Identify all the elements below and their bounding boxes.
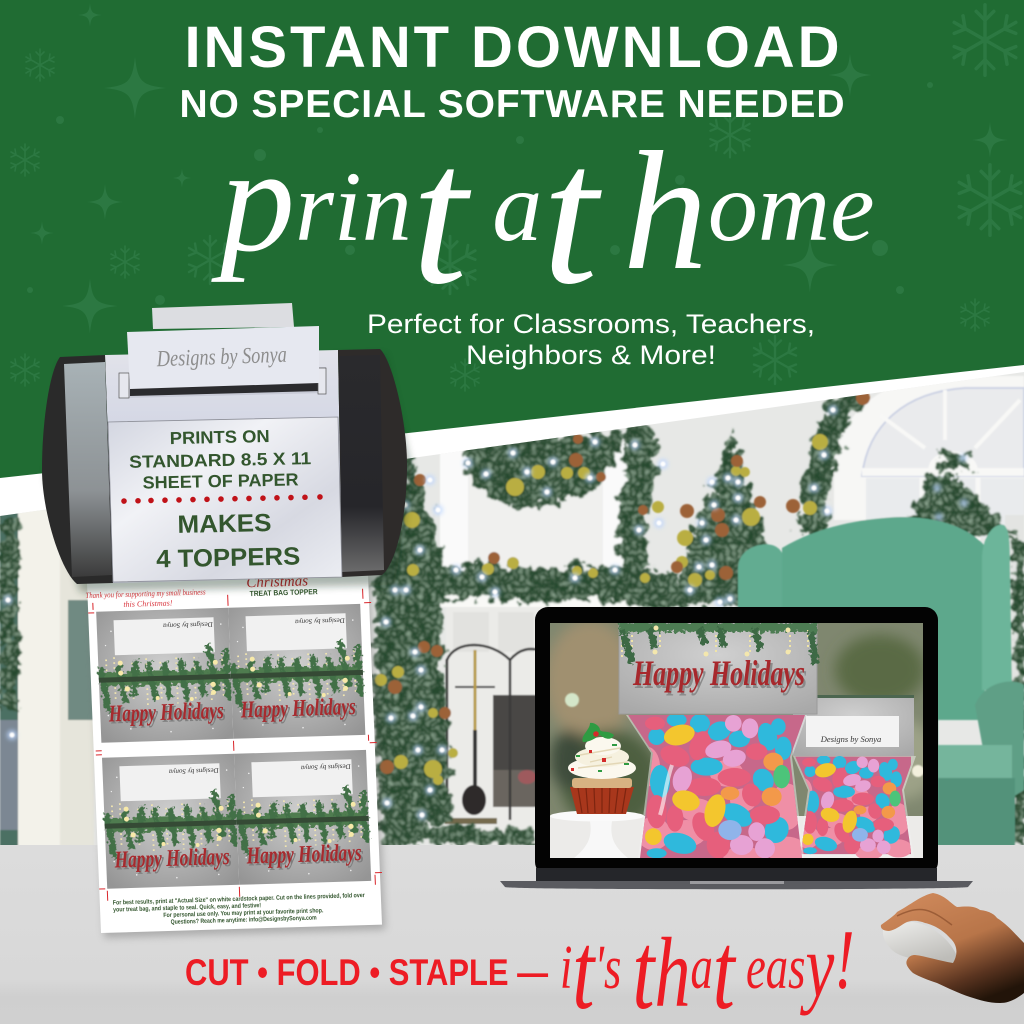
bottom slogan: a: [690, 933, 713, 1002]
small topper: [793, 695, 914, 756]
bottom slogan: !: [834, 913, 855, 1008]
front panel: [108, 417, 342, 582]
white mantel and fireplace: [440, 593, 650, 845]
bottom slogan: 's: [594, 933, 632, 1002]
printer label text: [120, 425, 324, 574]
script heading: print at home: h: [623, 117, 708, 305]
topper panel 2: Happy Holidays: [240, 694, 356, 724]
laptop screen: [550, 623, 923, 858]
cupcake: [568, 723, 636, 814]
topper panel 4: Designs by Sonya: [300, 762, 352, 772]
sheet instructions: [113, 892, 366, 928]
topper panel 3: [102, 754, 239, 889]
paper emerging from printer: Designs by Sonya: [156, 342, 287, 371]
sheet instructions: your treat bag, and staple to seal. Quick, easy, and festive!: [113, 902, 261, 914]
laptop hinge and base: [500, 868, 973, 889]
large topper: [619, 623, 817, 714]
topper panel 3: Happy Holidays: [113, 844, 230, 874]
printer label text: PRINTS ON: [169, 426, 270, 448]
sheet instructions: For personal use only. You may print at your favorite print shop.: [163, 907, 324, 919]
left grip: [42, 355, 113, 584]
bottom slogan: [185, 910, 855, 1024]
cut marks: [88, 589, 383, 901]
tagline: Neighbors & More!: [466, 340, 716, 370]
topper panel 4: [234, 750, 371, 885]
sheet header text: [85, 573, 319, 610]
foliage: trees, wreath and garlands: [0, 393, 1024, 845]
sheet instructions: Questions? Reach me anytime: info@DesignsbySonya.com: [171, 915, 317, 926]
arched window: [834, 376, 1024, 845]
topper panel 4: Happy Holidays: [245, 840, 362, 870]
sheet header text: Christmas: [246, 573, 309, 591]
hand: [881, 893, 1024, 1003]
topper panel 2: Happy Holidays: [242, 696, 358, 726]
sheet header text: Thank you for supporting my small business: [85, 587, 206, 600]
script heading: print at home: t: [542, 105, 602, 326]
fairy lights: [3, 405, 968, 820]
script heading: print at home: rin: [295, 151, 412, 262]
sheet instructions: For best results, print at "Actual Size" on white cardstock paper. Cut on the lines provided, fold over: [113, 892, 365, 907]
left window and columns: [0, 510, 94, 850]
green header background: [0, 0, 1024, 520]
finger creases: [897, 909, 952, 925]
sheet header text: TREAT BAG TOPPER: [249, 587, 318, 598]
back paper tray: [152, 303, 294, 329]
title: instant download: INSTANT DOWNLOAD: [184, 15, 840, 80]
bottom slogan: eas: [735, 933, 805, 1002]
printer shadow: [46, 355, 412, 592]
small topper: Designs by Sonya: [820, 734, 881, 744]
script heading: print at home: ome: [708, 151, 874, 262]
bottom slogan: CUT • FOLD • STAPLE —: [185, 952, 548, 993]
topper panel 4: Happy Holidays: [247, 842, 364, 872]
script heading: print at home: p: [211, 117, 295, 283]
small treat bag: [791, 695, 916, 860]
tagline: [367, 309, 815, 370]
topper panel 3: Happy Holidays: [115, 846, 232, 875]
printer label text: SHEET OF PAPER: [142, 469, 299, 493]
tagline: Perfect for Classrooms, Teachers,: [367, 309, 815, 339]
room photo background: [0, 370, 1024, 850]
grey floor: [0, 845, 1024, 1024]
table: [550, 816, 923, 858]
decorative snowflakes and sparkles: [11, 3, 1021, 391]
red dotted divider: [121, 494, 323, 504]
topper panel 1: Designs by Sonya: [162, 620, 214, 630]
topper panel 1: [96, 608, 233, 743]
right grip: [338, 349, 407, 577]
script heading: print at home: a: [467, 151, 542, 262]
cake stand: [550, 810, 644, 858]
topper panel 1: Happy Holidays: [110, 700, 226, 729]
large topper: Happy Holidays: [634, 656, 807, 696]
large treat bag: [619, 623, 817, 867]
mouse: [883, 922, 958, 966]
large topper: Happy Holidays: [632, 653, 805, 693]
printer label text: MAKES: [177, 509, 272, 539]
script heading: print at home: t: [412, 105, 472, 326]
printer label text: 4 TOPPERS: [156, 542, 300, 573]
white diagonal band: [0, 365, 1024, 520]
hand holding mouse: [881, 893, 1024, 1003]
ornaments: [375, 391, 870, 785]
printed sheet of toppers: [85, 571, 385, 938]
topper panel 3: Designs by Sonya: [168, 766, 220, 776]
printer label text: STANDARD 8.5 X 11: [129, 448, 312, 472]
paper emerging from printer: [127, 326, 319, 389]
bottom slogan: y: [800, 916, 834, 1016]
sheet header text: this Christmas!: [123, 598, 173, 609]
topper panel 1: Happy Holidays: [108, 698, 224, 728]
topper panel 2: Designs by Sonya: [294, 616, 346, 626]
printer body: [105, 350, 342, 583]
laptop lid: [535, 607, 938, 875]
printer slot: [119, 367, 326, 398]
white door: [440, 440, 632, 595]
green wing chair: [738, 517, 1024, 846]
laptop: [500, 607, 973, 889]
printer: [42, 303, 412, 592]
topper panel 2: [228, 604, 365, 739]
bottom slogan: i: [560, 933, 572, 1002]
subtitle: no special software: NO SPECIAL SOFTWARE NEEDED: [180, 83, 844, 126]
